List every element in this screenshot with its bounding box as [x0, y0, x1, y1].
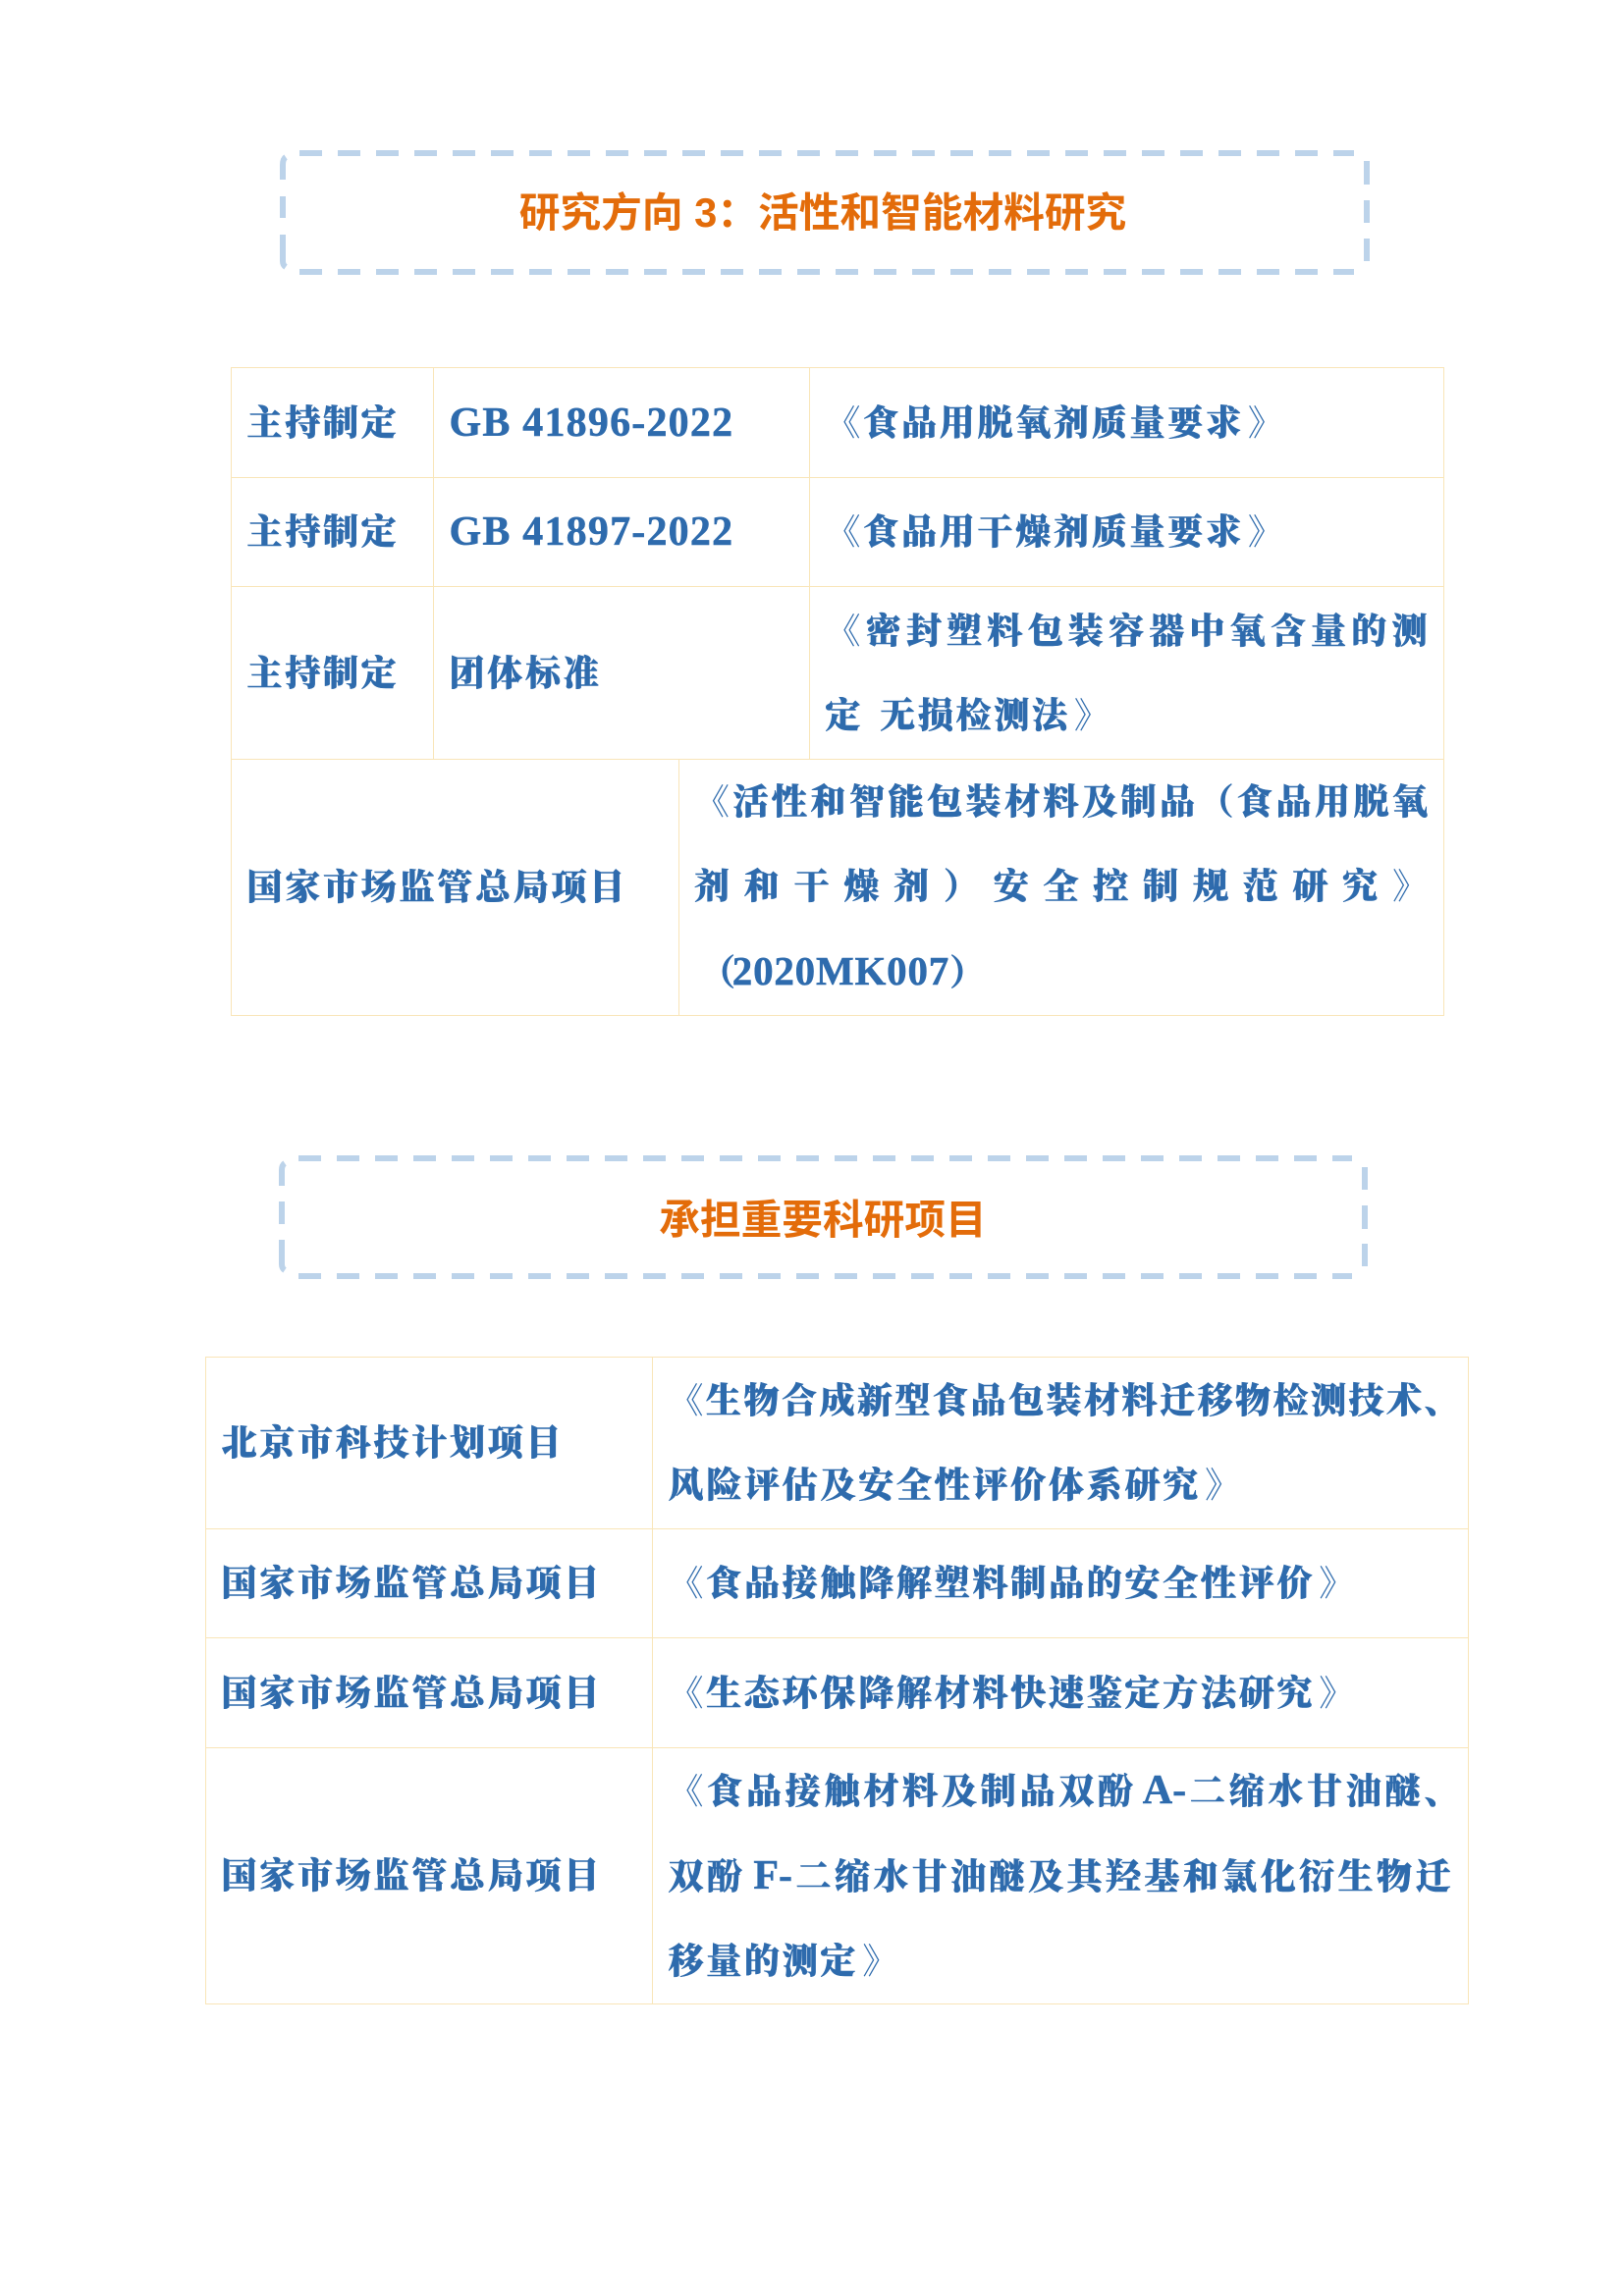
row 4: 《活性和智能包装材料及制品（食品用脱氧	[694, 782, 1428, 822]
row 1	[231, 367, 1444, 477]
row 4: 国家市场监管总局项目	[247, 868, 627, 907]
row 4: 国家市场监管总局项目	[222, 1856, 602, 1896]
dashed title frame 2	[279, 1155, 1368, 1279]
row 1: GB 41896-2022	[450, 400, 733, 446]
row 1	[205, 1357, 1469, 1528]
row 4: 剂和干燥剂）安全控制规范研究》	[694, 867, 1428, 906]
row 4	[231, 760, 1444, 1016]
row 2: 《食品接触降解塑料制品的安全性评价》	[668, 1564, 1357, 1603]
row 3: 主持制定	[247, 654, 400, 693]
row 1: 主持制定	[247, 402, 400, 442]
row 1: 《食品用脱氧剂质量要求》	[825, 402, 1286, 442]
row 3: 团体标准	[450, 654, 602, 693]
dashed title frame 1	[280, 150, 1370, 275]
heading: major research projects: 承担重要科研项目	[659, 1197, 987, 1243]
research projects table	[205, 1357, 1469, 2004]
row 2: GB 41897-2022	[450, 509, 733, 555]
heading: research direction 3: 研究方向 3：活性和智能材料研究	[519, 189, 1126, 236]
row 4: 《食品接触材料及制品双酚A-二缩水甘油醚、	[668, 1768, 1459, 1813]
row 2: 《食品用干燥剂质量要求》	[825, 512, 1286, 552]
row 3	[231, 587, 1444, 759]
row 3: 国家市场监管总局项目	[222, 1673, 602, 1712]
row 1: 《生物合成新型食品包装材料迁移物检测技术、	[668, 1381, 1459, 1420]
row 2	[205, 1529, 1469, 1637]
row 2: 主持制定	[247, 512, 400, 552]
row 4	[205, 1748, 1469, 2004]
standards table	[231, 367, 1444, 1016]
row 4: 移量的测定》	[668, 1942, 900, 1981]
row 1: 风险评估及安全性评价体系研究》	[668, 1466, 1243, 1505]
row 2: 国家市场监管总局项目	[222, 1564, 602, 1603]
row 3: 定 无损检测法》	[825, 695, 1112, 734]
row 4: 双酚F-二缩水甘油醚及其羟基和氯化衍生物迁	[668, 1853, 1451, 1898]
row 3	[205, 1638, 1469, 1747]
row 3: 《密封塑料包装容器中氧含量的测	[825, 611, 1427, 650]
row 4: （2020MK007）	[700, 948, 988, 993]
row 2	[231, 478, 1444, 586]
row 1: 北京市科技计划项目	[222, 1423, 564, 1463]
row 3: 《生态环保降解材料快速鉴定方法研究》	[668, 1673, 1357, 1712]
